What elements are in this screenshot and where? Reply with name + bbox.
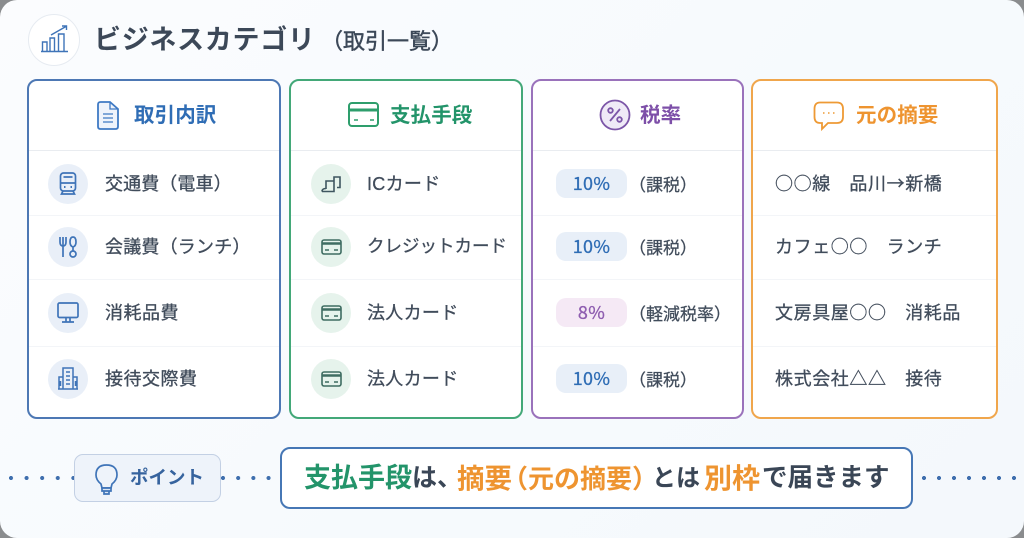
panel: 税率: （課税）	[629, 234, 697, 259]
row: 10% 課税: 10%	[573, 233, 610, 259]
row: ○○線: ○○線 品川→新橋	[775, 170, 942, 196]
badge label: ポイント	[130, 467, 204, 488]
subtitle: （取引一覧）	[321, 29, 453, 54]
key message box	[280, 447, 913, 509]
panel: 支払手段: 法人カード	[367, 303, 458, 323]
row: 10% 課税: 10%	[573, 170, 610, 196]
row: 消耗品費	[48, 293, 88, 333]
panel: 取引内訳: 消耗品費	[105, 303, 179, 323]
panel: 取引内訳: 会議費（ランチ）	[105, 237, 251, 257]
row: クレジットカード	[311, 227, 351, 267]
heading: 元の摘要	[856, 104, 938, 127]
key message	[304, 463, 890, 494]
key message: は、	[412, 464, 462, 492]
panel: 税率: （課税）	[629, 171, 697, 196]
key message: （元の摘要）	[502, 464, 658, 494]
icon: light bulb	[95, 464, 118, 495]
row: 8% 軽減税率: 8%	[578, 299, 605, 325]
heading: 支払手段	[390, 104, 472, 127]
row: 法人カード	[311, 359, 351, 399]
title: ビジネスカテゴリ	[94, 25, 316, 55]
key message: 別枠	[704, 463, 760, 494]
row: 法人カード	[311, 293, 351, 333]
row: 10% 課税: 10%	[573, 365, 610, 391]
title icon: growth chart	[28, 14, 80, 66]
icon: speech bubble	[814, 102, 844, 131]
panel: 税率	[531, 79, 744, 419]
panel: 取引内訳	[27, 79, 281, 419]
panel: 支払手段: ICカード	[367, 174, 440, 194]
panel: 支払手段	[289, 79, 523, 419]
row: 交通費	[48, 164, 88, 204]
row: カフェ: カフェ○○ ランチ	[775, 233, 942, 259]
row: 会議費	[48, 227, 88, 267]
key message: 支払手段	[304, 463, 412, 493]
panel: 元の摘要	[751, 79, 998, 419]
panel: 支払手段: 法人カード	[367, 369, 458, 389]
point badge	[74, 454, 221, 502]
heading: 取引内訳	[134, 104, 216, 127]
heading: 税率	[640, 104, 681, 127]
key message: 摘要	[457, 463, 512, 494]
row: 接待交際費	[48, 359, 88, 399]
row: 8% 軽減税率	[556, 298, 627, 327]
row: 10% 課税	[556, 232, 627, 261]
row: ICカード	[311, 164, 351, 204]
row: 10% 課税	[556, 364, 627, 393]
panel: 取引内訳: 接待交際費	[105, 369, 198, 389]
panel: 税率: （軽減税率）	[629, 300, 731, 325]
icon: percent	[600, 100, 630, 130]
panel: 支払手段: クレジットカード	[367, 236, 507, 256]
panel: 取引内訳: 交通費（電車）	[105, 174, 232, 194]
row: 文房具屋: 文房具屋○○ 消耗品	[775, 299, 961, 325]
panel: 税率: （課税）	[629, 366, 697, 391]
row: 10% 課税	[556, 169, 627, 198]
icon: document	[97, 101, 119, 130]
key message: で届きます	[762, 464, 890, 492]
row: 株式会社: 株式会社△△ 接待	[775, 365, 942, 391]
key message: とは	[652, 465, 700, 492]
icon: card	[348, 102, 379, 127]
